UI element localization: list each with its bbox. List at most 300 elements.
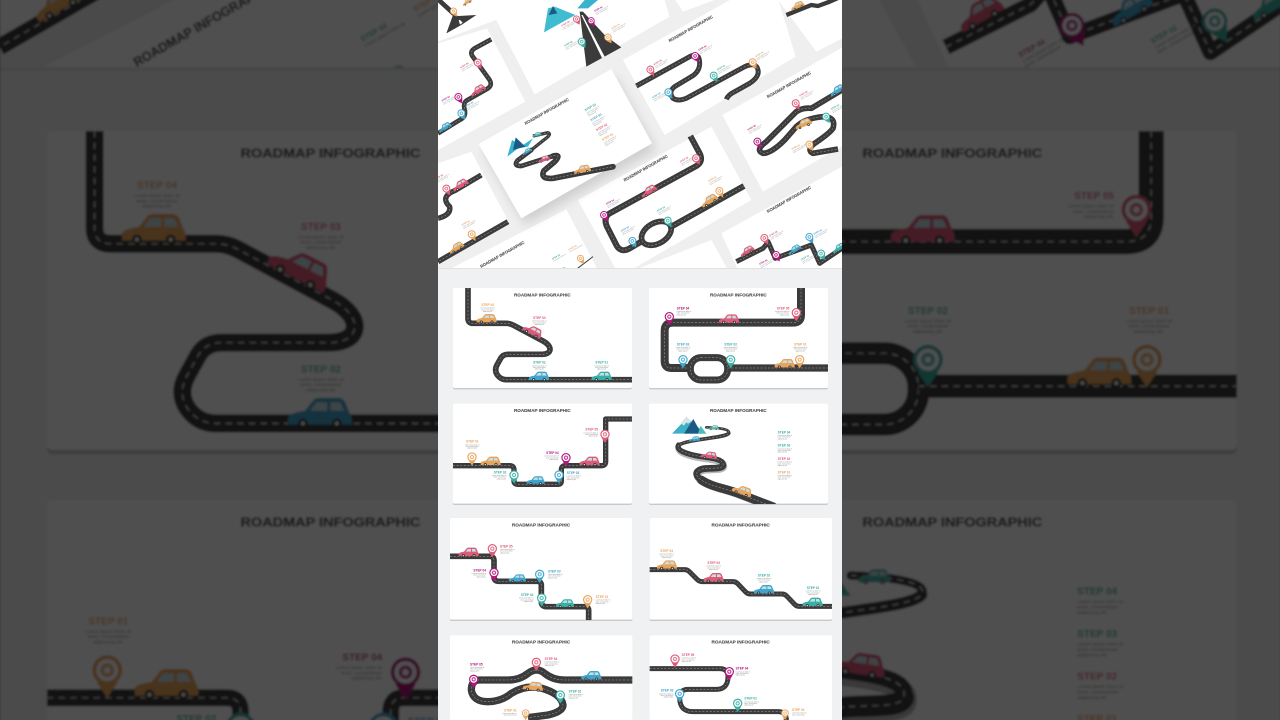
step 03 label: adipiscing elit. <box>567 478 577 481</box>
panel: focused slide with mountain road <box>479 69 652 218</box>
step 04 label: STEP 04 <box>736 667 748 671</box>
step 01 label: amet, consectetuer <box>504 714 517 717</box>
panel: bottom slide fragment: Lorem ipsum dolor sit <box>552 253 567 263</box>
step 04 label <box>544 451 559 461</box>
step 02 text: STEP 02 <box>778 457 790 461</box>
step 02 label: amet, consectetuer <box>569 695 582 698</box>
pin: step 04 <box>561 453 571 466</box>
step 01 label <box>793 342 808 352</box>
step 02 label: STEP 02 <box>569 689 581 693</box>
panel: slide with S-curve road: STEP 02 <box>717 65 727 72</box>
panel: slide with S-curve road: Lorem ipsum dolor sit <box>756 50 770 60</box>
panel: slide with zigzag road: STEP 05 <box>769 231 779 238</box>
panel: slide with funnel road and mountains: Lorem ipsum dolor sit <box>565 39 579 49</box>
car: blue <box>509 574 526 583</box>
step 04 label: amet, consectetuer <box>677 312 690 315</box>
car: blue <box>527 476 545 485</box>
step list <box>584 103 616 146</box>
panel: slide 5 <box>450 518 632 621</box>
pin: step 03 <box>554 470 564 484</box>
step 04 label: STEP 04 <box>481 303 494 307</box>
panel: lower left slide road: STEP 05 <box>435 174 445 181</box>
step 01 label: STEP 01 <box>794 342 807 346</box>
panel: lower left slide road: Lorem ipsum dolor sit <box>435 173 450 183</box>
panel: slide with looping road: STEP 05 <box>748 125 757 132</box>
looping road <box>471 670 632 718</box>
step 01 label: amet, consectetuer <box>807 591 820 594</box>
step 02 text <box>778 457 793 467</box>
pin: step 05 <box>600 430 610 443</box>
step 04 label: Lorem ipsum dolor sit <box>677 310 692 313</box>
step 02 label <box>744 697 759 707</box>
step 03 label: adipiscing elit. <box>535 323 545 326</box>
page background <box>438 0 842 720</box>
step 04 label: STEP 04 <box>546 451 559 455</box>
step 05 label: amet, consectetuer <box>500 550 513 553</box>
panel: slide with oval loop road: STEP 05 <box>680 157 690 164</box>
panel: bottom slide fragment: ROADMAP INFOGRAPHIC <box>479 240 525 269</box>
step 01 label: amet, consectetuer <box>596 600 609 603</box>
step 01 text: adipiscing elit. <box>778 477 788 480</box>
title: ROADMAP INFOGRAPHIC <box>524 97 570 126</box>
step 02 text: adipiscing elit. <box>778 464 788 467</box>
panel: bottom slide fragment: STEP 02 <box>552 254 562 261</box>
step list: Lorem ipsum dolor sit <box>586 104 600 115</box>
step 04 text: amet, consectetuer <box>778 436 791 439</box>
step 04 label <box>471 568 487 578</box>
step 04 label: STEP 04 <box>545 657 557 661</box>
panel: slide with oval loop road <box>599 136 744 250</box>
step 04 text <box>778 430 793 440</box>
car: pink <box>704 573 724 583</box>
step list: adipiscing elit. <box>605 140 615 147</box>
step 02 label: amet, consectetuer <box>758 579 771 582</box>
panel: slide with funnel road and mountains: amet, consectetuer <box>565 42 579 51</box>
step 01 label: amet, consectetuer <box>466 445 479 448</box>
step 04 label <box>659 549 674 559</box>
panel: slide with zigzag road: amet, consectetuer <box>802 256 815 265</box>
panel: left slide with staircase road: Lorem ipsum dolor sit <box>461 61 475 71</box>
step list: Lorem ipsum dolor sit <box>591 114 606 125</box>
step 04 label: amet, consectetuer <box>546 456 559 459</box>
step 01 label: Lorem ipsum dolor sit <box>502 712 517 715</box>
pin: step 01 <box>467 452 477 466</box>
step 02 label: STEP 02 <box>758 573 771 577</box>
step 03 label: amet, consectetuer <box>660 694 674 697</box>
step 01 label <box>596 595 611 605</box>
panel: slide with oval loop road: amet, consectetuer <box>622 227 635 236</box>
step 02 label: amet, consectetuer <box>533 366 546 369</box>
step 05 label: STEP 05 <box>470 662 483 666</box>
car: orange <box>481 457 501 466</box>
step 03 text: Lorem ipsum dolor sit <box>778 447 793 450</box>
step list: amet, consectetuer <box>592 117 605 126</box>
pin: step 04 <box>489 568 499 581</box>
panel: slide with looping road: amet, consectetuer <box>832 105 845 114</box>
slides group: rows 3 and 4 <box>450 518 832 720</box>
step 03 label: amet, consectetuer <box>677 348 690 351</box>
step 02 label: Lorem ipsum dolor sit <box>519 597 534 600</box>
panel: left slide with staircase road <box>437 39 491 134</box>
car: teal <box>592 372 612 381</box>
panel: slide with S-curve road: amet, consectetuer <box>718 66 731 75</box>
step 01 label: STEP 01 <box>504 708 517 712</box>
step 02 label: Lorem ipsum dolor sit <box>569 693 584 696</box>
pin: step 03 <box>675 689 684 702</box>
panel: slide with zigzag road: amet, consectetuer <box>815 230 828 239</box>
step 03 label: Lorem ipsum dolor sit <box>548 573 563 576</box>
panel: slide with oval loop road: Lorem ipsum dolor sit <box>606 198 621 208</box>
panel: slide with S-curve road: Lorem ipsum dolor sit <box>717 63 732 73</box>
step 03 label <box>676 342 691 352</box>
car: teal <box>709 425 719 430</box>
panel: slide with oval loop road: amet, consectetuer <box>658 207 671 216</box>
step 01 label: STEP 01 <box>596 595 608 599</box>
panel: left slide with staircase road: amet, consectetuer <box>443 97 456 106</box>
panel: slide 8 <box>650 635 832 720</box>
panel: slide 4 <box>649 404 828 508</box>
step 02 label: Lorem ipsum dolor sit <box>492 474 507 477</box>
car: teal <box>803 598 823 607</box>
step 05 label <box>583 428 599 438</box>
step 05 label <box>470 662 485 672</box>
step 04 label: amet, consectetuer <box>736 672 749 675</box>
panel: slide with S-curve road: Lorem ipsum dolor sit <box>699 44 713 54</box>
step 05 label: STEP 05 <box>585 428 598 432</box>
panel: slide with oval loop road: Lorem ipsum dolor sit <box>657 205 672 215</box>
step 03 label: STEP 03 <box>567 471 579 475</box>
step 03 label: amet, consectetuer <box>567 476 580 479</box>
step 04 text: adipiscing elit. <box>778 437 788 440</box>
step 04 label: STEP 04 <box>677 306 689 310</box>
step 01 label: amet, consectetuer <box>794 348 807 351</box>
step 01 label: adipiscing elit. <box>808 593 818 596</box>
car: orange <box>731 483 753 499</box>
step 02 label: amet, consectetuer <box>724 348 738 351</box>
pin: step 03 <box>678 355 688 368</box>
step 02 label: adipiscing elit. <box>497 477 507 480</box>
step 01 label: adipiscing elit. <box>468 447 478 450</box>
panel: slide with looping road: STEP 01 <box>792 144 801 151</box>
step 04 label: STEP 04 <box>660 549 673 553</box>
panel: bottom slide fragment: STEP 01 <box>569 245 578 252</box>
step 02 label: amet, consectetuer <box>520 598 534 601</box>
panel: slide with oval loop road: Lorem ipsum dolor sit <box>709 175 723 185</box>
step 05 label: STEP 05 <box>682 653 694 657</box>
step 05 label: adipiscing elit. <box>500 551 510 554</box>
panel: left slide with staircase road: Lorem ipsum dolor sit <box>442 94 457 104</box>
panel: slide with looping road: amet, consectetuer <box>793 145 806 154</box>
step 05 label <box>500 544 515 554</box>
step 01 label: Lorem ipsum dolor sit <box>594 364 609 367</box>
step list: STEP 04 <box>584 102 597 112</box>
step 02 label: Lorem ipsum dolor sit <box>757 577 772 580</box>
step list: Lorem ipsum dolor sit <box>597 124 612 135</box>
step 01 label: amet, consectetuer <box>792 713 805 716</box>
step 01 text: Lorem ipsum dolor sit <box>778 474 793 477</box>
panel: slide 3 <box>453 404 632 505</box>
step list: STEP 03 <box>590 112 603 122</box>
panel: slide with S-curve road: amet, consectetuer <box>699 46 713 55</box>
step 01 label: STEP 01 <box>807 586 820 590</box>
step 01 label <box>594 361 609 370</box>
step 03 label <box>567 471 582 481</box>
pin: step 04 <box>725 667 734 680</box>
stepped road <box>650 570 832 606</box>
pin: step 03 <box>535 570 544 583</box>
step 04 label: amet, consectetuer <box>660 554 674 557</box>
step 05 label: STEP 05 <box>500 544 513 548</box>
panel: slide with looping road <box>748 70 847 154</box>
step 02 label: adipiscing elit. <box>535 368 545 371</box>
step 05 label: amet, consectetuer <box>470 668 483 671</box>
panel: slide 2 <box>649 288 828 389</box>
step 04 label: adipiscing elit. <box>662 556 672 559</box>
step 05 label <box>775 306 790 316</box>
pin: step 05 <box>488 544 497 557</box>
step 01 label: adipiscing elit. <box>796 349 806 352</box>
step 04 label: adipiscing elit. <box>483 310 493 313</box>
panel: left slide with staircase road: STEP 03 <box>465 102 475 108</box>
step 04 label: STEP 04 <box>473 568 486 572</box>
step 03 label: Lorem ipsum dolor sit <box>659 692 674 695</box>
step 01 label <box>465 440 480 450</box>
step 01 text: STEP 01 <box>778 470 790 474</box>
step 05 label: adipiscing elit. <box>588 435 599 438</box>
step 02 label: amet, consectetuer <box>493 476 507 479</box>
car: orange <box>775 359 795 369</box>
winding road <box>678 427 774 508</box>
step 03 label: Lorem ipsum dolor sit <box>567 475 582 478</box>
heading: ROADMAP INFOGRAPHIC <box>711 522 770 527</box>
road <box>450 556 589 620</box>
heading: ROADMAP INFOGRAPHIC <box>710 408 767 413</box>
panel: slide with oval loop road: STEP 03 <box>621 226 631 233</box>
panel: slide with zigzag road: STEP 04 <box>759 258 769 266</box>
step 03 label: Lorem ipsum dolor sit <box>532 320 547 323</box>
heading: ROADMAP INFOGRAPHIC <box>710 292 767 297</box>
pin: step 01 <box>795 355 804 368</box>
panel: slide with looping road: Lorem ipsum dolor sit <box>831 103 846 113</box>
step 03 label: STEP 03 <box>707 561 720 565</box>
step 04 label: Lorem ipsum dolor sit <box>471 572 487 575</box>
step 03 label: adipiscing elit. <box>664 696 674 699</box>
panel: slide with funnel road and mountains: amet, consectetuer <box>595 7 609 16</box>
icon: mountain <box>507 137 533 157</box>
step 02 label <box>532 361 547 371</box>
panel: slide with zigzag road: STEP 02 <box>801 255 811 262</box>
panel: slide with S-curve road: Lorem ipsum dolor sit <box>654 58 669 68</box>
strip bottom line <box>438 268 842 269</box>
panel: slide with funnel road and mountains: amet, consectetuer <box>562 22 576 31</box>
step 05 label: Lorem ipsum dolor sit <box>470 666 485 669</box>
step 05 label: amet, consectetuer <box>682 658 695 661</box>
heading: ROADMAP INFOGRAPHIC <box>512 640 570 645</box>
road <box>468 288 632 380</box>
step 01 label: amet, consectetuer <box>595 366 609 369</box>
step 01 label: Lorem ipsum dolor sit <box>596 599 611 602</box>
panel: lower left slide road: Lorem ipsum dolor sit <box>462 219 477 229</box>
step 03 label <box>659 689 674 699</box>
step 04 label: adipiscing elit. <box>677 313 687 316</box>
step 05 label: amet, consectetuer <box>585 433 598 436</box>
step 04 label: adipiscing elit. <box>549 458 559 461</box>
panel: slide with S-curve road: Lorem ipsum dolor sit <box>653 91 667 101</box>
step list: amet, consectetuer <box>598 127 611 136</box>
panel: lower left slide road: amet, consectetuer <box>463 221 476 230</box>
heading: ROADMAP INFOGRAPHIC <box>514 292 571 297</box>
panel: slide with oval loop road: amet, consectetuer <box>709 177 723 186</box>
step 02 label: adipiscing elit. <box>524 600 534 603</box>
step 02 text: Lorem ipsum dolor sit <box>778 461 793 464</box>
step 04 label: Lorem ipsum dolor sit <box>480 307 495 310</box>
panel: left slide with staircase road: amet, consectetuer <box>461 63 475 72</box>
step 03 label: amet, consectetuer <box>548 575 561 578</box>
car: pink <box>701 450 718 460</box>
step 04 label: Lorem ipsum dolor sit <box>736 670 751 673</box>
panel: slide with looping road: Lorem ipsum dolor sit <box>800 89 814 99</box>
panel: slide with S-curve road: amet, consectetuer <box>655 60 668 69</box>
step 03 label: STEP 03 <box>677 342 690 346</box>
panel: left slide with staircase road: Lorem ipsum dolor sit <box>466 100 480 110</box>
step 01 label: Lorem ipsum dolor sit <box>792 712 807 715</box>
step 02 label: STEP 02 <box>494 470 507 474</box>
panel: slide with S-curve road: amet, consectetuer <box>653 93 667 102</box>
step 04 label: Lorem ipsum dolor sit <box>659 553 674 556</box>
step 02 label: STEP 02 <box>744 697 757 701</box>
step 01 label <box>502 708 517 717</box>
pin: step 02 <box>726 355 735 368</box>
panel: slide with looping road: amet, consectetuer <box>800 92 814 101</box>
panel: slide with looping road: STEP 04 <box>799 90 809 98</box>
panel: slide with funnel road and mountains: Lorem ipsum dolor sit <box>595 5 609 15</box>
step 01 label: Lorem ipsum dolor sit <box>793 346 808 349</box>
panel: slide with zigzag road: Lorem ipsum dolor sit <box>814 228 829 238</box>
step 03 label <box>532 316 547 326</box>
cars on road <box>521 132 591 175</box>
panel: left slide with staircase road: STEP 05 <box>460 63 470 69</box>
step 03 label: STEP 03 <box>548 569 561 573</box>
step 03 text <box>778 444 793 454</box>
step 01 label: adipiscing elit. <box>597 368 607 371</box>
step 04 label: adipiscing elit. <box>545 664 555 667</box>
panel: slide with S-curve road: STEP 04 <box>698 44 708 52</box>
step 01 label: Lorem ipsum dolor sit <box>465 443 480 446</box>
panel: slide 1 <box>453 288 632 389</box>
panel: slide with funnel road and mountains: STEP 02 <box>564 41 574 48</box>
step 01 label <box>792 708 807 716</box>
panel: slide with looping road: STEP 02 <box>831 104 841 111</box>
step 05 label <box>682 653 697 663</box>
panel: slide with oval loop road: amet, consectetuer <box>681 158 694 167</box>
step 05 label: Lorem ipsum dolor sit <box>583 431 599 434</box>
panel: slide with oval loop road: amet, consectetuer <box>607 200 620 209</box>
step 04 label <box>677 306 692 316</box>
step 01 label: STEP 01 <box>792 708 805 712</box>
icon: mountains <box>672 416 706 434</box>
winding road <box>650 669 786 720</box>
panel: top left road fragment <box>437 0 476 33</box>
car: pink <box>580 457 600 466</box>
step 02 label <box>492 470 507 480</box>
panel: slide with S-curve road: STEP 03 <box>652 93 662 99</box>
pin: step 01 <box>781 709 789 720</box>
step 03 label <box>706 561 721 571</box>
step 04 text: STEP 04 <box>778 430 790 434</box>
winding road <box>516 133 613 178</box>
pin: step 02 <box>733 699 742 712</box>
step list: amet, consectetuer <box>604 136 617 146</box>
panel: slide with S-curve road: STEP 01 <box>755 52 765 58</box>
step 04 label <box>736 667 751 677</box>
panel: slide with looping road: Lorem ipsum dolor sit <box>792 143 807 153</box>
step 02 label: STEP 02 <box>533 361 546 365</box>
step 03 text: amet, consectetuer <box>778 449 791 452</box>
panel: slide with zigzag road: amet, consectetuer <box>770 232 784 241</box>
pin: step 02 <box>509 470 519 484</box>
step 04 text: Lorem ipsum dolor sit <box>778 434 793 437</box>
panel: slide with oval loop road: STEP 02 <box>657 206 667 213</box>
step 02 label: Lorem ipsum dolor sit <box>532 364 547 367</box>
panel: slide 7 <box>450 635 632 720</box>
panel: slide with funnel road and mountains: STEP 05 <box>561 21 571 28</box>
step 02 text: amet, consectetuer <box>778 462 791 465</box>
step 05 label: adipiscing elit. <box>780 313 790 316</box>
step list: adipiscing elit. <box>599 130 609 137</box>
car: orange <box>523 681 544 692</box>
step 02 label <box>723 342 738 352</box>
step 02 label <box>757 573 772 583</box>
car: pink <box>459 548 479 557</box>
pin: step 01 <box>583 595 592 608</box>
panel: slide with funnel road and mountains: STEP 04 <box>594 5 604 13</box>
step 03 label: STEP 03 <box>533 316 546 320</box>
car: teal <box>556 599 574 608</box>
step 03 label <box>548 569 563 579</box>
step 05 label: adipiscing elit. <box>682 660 692 663</box>
step 04 label: Lorem ipsum dolor sit <box>545 661 560 664</box>
panel: lower left slide road: STEP 01 <box>462 220 471 227</box>
panel: slide with zigzag road: amet, consectetuer <box>760 260 774 269</box>
car: blue <box>581 671 601 681</box>
panel: slide with zigzag road: Lorem ipsum dolor sit <box>770 229 784 239</box>
step 02 label: adipiscing elit. <box>759 580 769 583</box>
step 02 label: STEP 02 <box>521 593 534 597</box>
panel: slide with looping road: amet, consectetuer <box>749 126 762 135</box>
panel: slide 6 <box>650 518 832 621</box>
panel: bottom slide fragment <box>479 240 593 278</box>
step 04 label: adipiscing elit. <box>476 575 487 578</box>
pin: step 05 <box>469 675 478 688</box>
pin: step 05 <box>792 308 801 321</box>
panel: slide with oval loop road: Lorem ipsum dolor sit <box>621 225 636 235</box>
center feed column <box>438 0 842 720</box>
step 02 label: amet, consectetuer <box>744 702 758 705</box>
panel: slide with funnel road and mountains <box>544 0 627 67</box>
step 05 label: adipiscing elit. <box>470 669 480 672</box>
step 04 label <box>545 657 560 667</box>
step 02 label: adipiscing elit. <box>726 349 736 352</box>
step 01 label: adipiscing elit. <box>596 602 606 605</box>
step 05 label: Lorem ipsum dolor sit <box>682 657 697 660</box>
car: blue <box>689 436 700 442</box>
panel: slide with looping road: Lorem ipsum dolor sit <box>748 123 763 133</box>
step 02 label: adipiscing elit. <box>744 704 754 707</box>
step 02 label: Lorem ipsum dolor sit <box>723 346 738 349</box>
step 03 label: amet, consectetuer <box>533 321 546 324</box>
car: pink <box>719 314 739 324</box>
pin: step 02 <box>537 593 546 607</box>
